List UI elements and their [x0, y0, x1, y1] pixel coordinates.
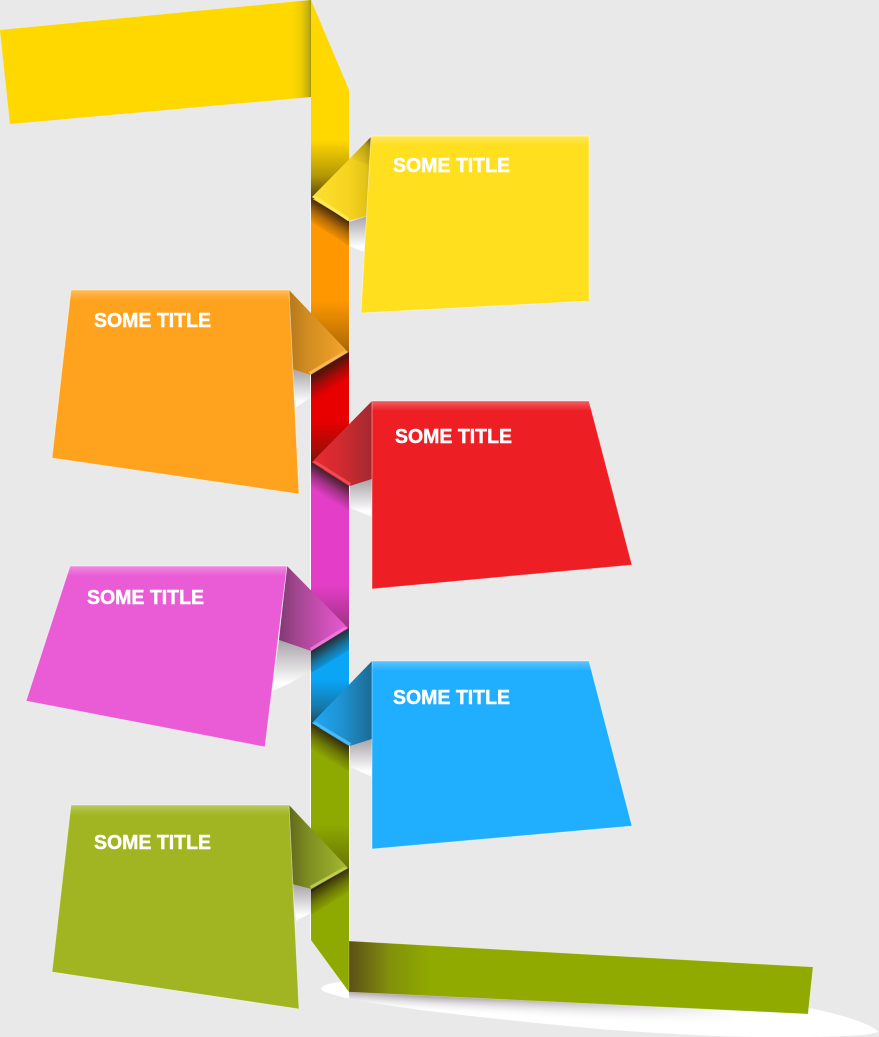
title: SOME TITLE [395, 426, 512, 448]
spine: red segment [310, 352, 350, 486]
spine: green segment [310, 723, 350, 992]
title: SOME TITLE [393, 687, 510, 709]
spine: orange segment [310, 198, 350, 375]
bottom green ribbon [349, 941, 813, 1014]
spine: yellow segment shade [311, 140, 349, 199]
panel: yellow [312, 136, 589, 313]
panel: blue [312, 661, 632, 849]
fold shadow [272, 640, 311, 691]
panel: magenta [26, 566, 348, 747]
top yellow ribbon [0, 0, 349, 225]
fold shadow [292, 884, 311, 921]
arrow fold [279, 566, 348, 651]
card [52, 805, 299, 1009]
title: SOME TITLE [87, 587, 204, 609]
card [372, 661, 632, 849]
title: SOME TITLE [94, 832, 211, 854]
card [52, 290, 299, 494]
panel: green [52, 805, 348, 1009]
arrow fold [289, 805, 348, 889]
title: SOME TITLE [94, 310, 211, 332]
spine: magenta segment [310, 462, 350, 651]
spine: blue segment [310, 628, 350, 746]
arrow fold [312, 136, 372, 221]
card [361, 136, 589, 313]
title: SOME TITLE [393, 155, 510, 177]
fold shadow [350, 739, 372, 777]
floor shadow under bottom ribbon [321, 982, 878, 1037]
fold shadow [350, 479, 372, 517]
panel: orange [52, 290, 348, 494]
panel: red [312, 401, 632, 589]
vertical ribbon spine [310, 140, 350, 992]
arrow fold [289, 290, 348, 375]
card [372, 401, 632, 589]
arrow fold [312, 661, 372, 746]
fold shadow [292, 369, 310, 408]
card [26, 566, 287, 747]
arrow fold [312, 401, 372, 486]
fold shadow [349, 216, 368, 252]
